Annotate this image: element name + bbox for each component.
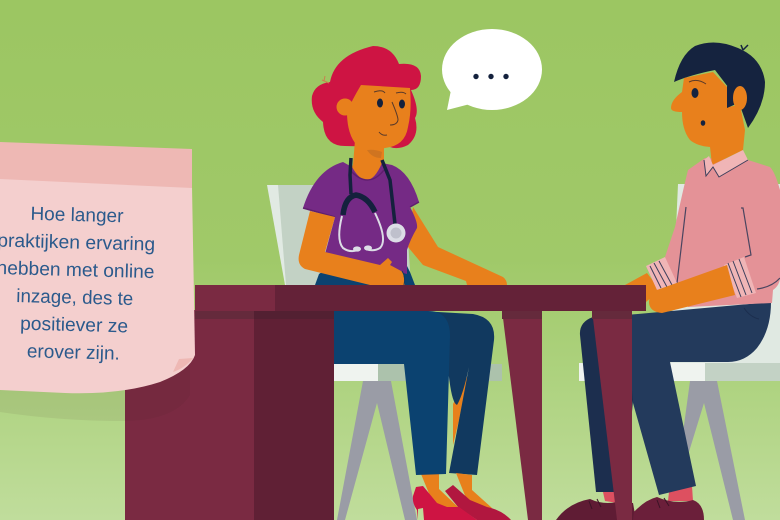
desk xyxy=(125,285,646,520)
doctor upper body xyxy=(299,46,507,285)
back calf xyxy=(453,375,468,445)
right arm xyxy=(408,207,507,285)
note body xyxy=(0,178,195,393)
patient xyxy=(556,42,780,520)
eyebrow xyxy=(689,80,706,84)
stethoscope xyxy=(339,158,406,252)
chair: patient xyxy=(579,184,780,520)
note text: Hoe langer xyxy=(30,204,124,227)
back shoe xyxy=(445,485,511,520)
tabletop xyxy=(195,285,275,311)
under-top shadow xyxy=(195,311,254,319)
desk legs xyxy=(502,310,542,520)
facial lines xyxy=(374,91,406,135)
note text: hebben met online xyxy=(0,258,155,283)
back hand xyxy=(625,273,660,302)
hair xyxy=(674,42,765,128)
note text xyxy=(0,203,156,366)
note fold xyxy=(173,358,193,372)
note text: erover zijn. xyxy=(27,341,120,365)
ankles xyxy=(421,474,459,508)
note header band xyxy=(0,142,192,188)
ear xyxy=(733,86,747,110)
hair xyxy=(312,46,421,148)
note text: inzage, des te xyxy=(16,286,134,310)
ellipsis dots xyxy=(473,74,479,79)
right cuff xyxy=(724,257,756,298)
left cabinet xyxy=(125,310,254,520)
note text: praktijken ervaring xyxy=(0,230,155,256)
front trouser leg xyxy=(626,302,771,495)
neck and face xyxy=(671,72,745,165)
left arm xyxy=(299,211,405,285)
back trouser leg xyxy=(580,317,640,492)
eyes xyxy=(377,98,383,108)
chair: doctor xyxy=(267,185,502,520)
sweater xyxy=(665,158,780,307)
note shadow xyxy=(0,350,190,421)
stray hair xyxy=(322,76,329,83)
face xyxy=(347,85,411,150)
collar xyxy=(704,150,748,177)
front arm xyxy=(649,265,735,313)
back trouser leg xyxy=(420,311,494,475)
mouth xyxy=(701,120,705,126)
front trouser leg xyxy=(334,311,450,475)
t-shirt xyxy=(303,162,419,274)
shoes xyxy=(556,499,636,520)
note text: positiever ze xyxy=(20,314,128,337)
speech bubble xyxy=(442,29,542,110)
socks xyxy=(603,492,618,503)
eye xyxy=(692,88,698,98)
sweater lines xyxy=(677,207,780,289)
trousers waist xyxy=(315,260,415,285)
sideburn xyxy=(727,86,738,108)
doctor legs xyxy=(334,311,511,520)
neck xyxy=(340,140,395,185)
hair tuft xyxy=(741,45,748,50)
shoe laces xyxy=(589,498,669,509)
ear xyxy=(336,98,354,116)
neck shadow xyxy=(367,150,382,158)
front shoe xyxy=(413,486,477,520)
left cuff xyxy=(646,257,677,290)
sticky note xyxy=(0,142,195,393)
